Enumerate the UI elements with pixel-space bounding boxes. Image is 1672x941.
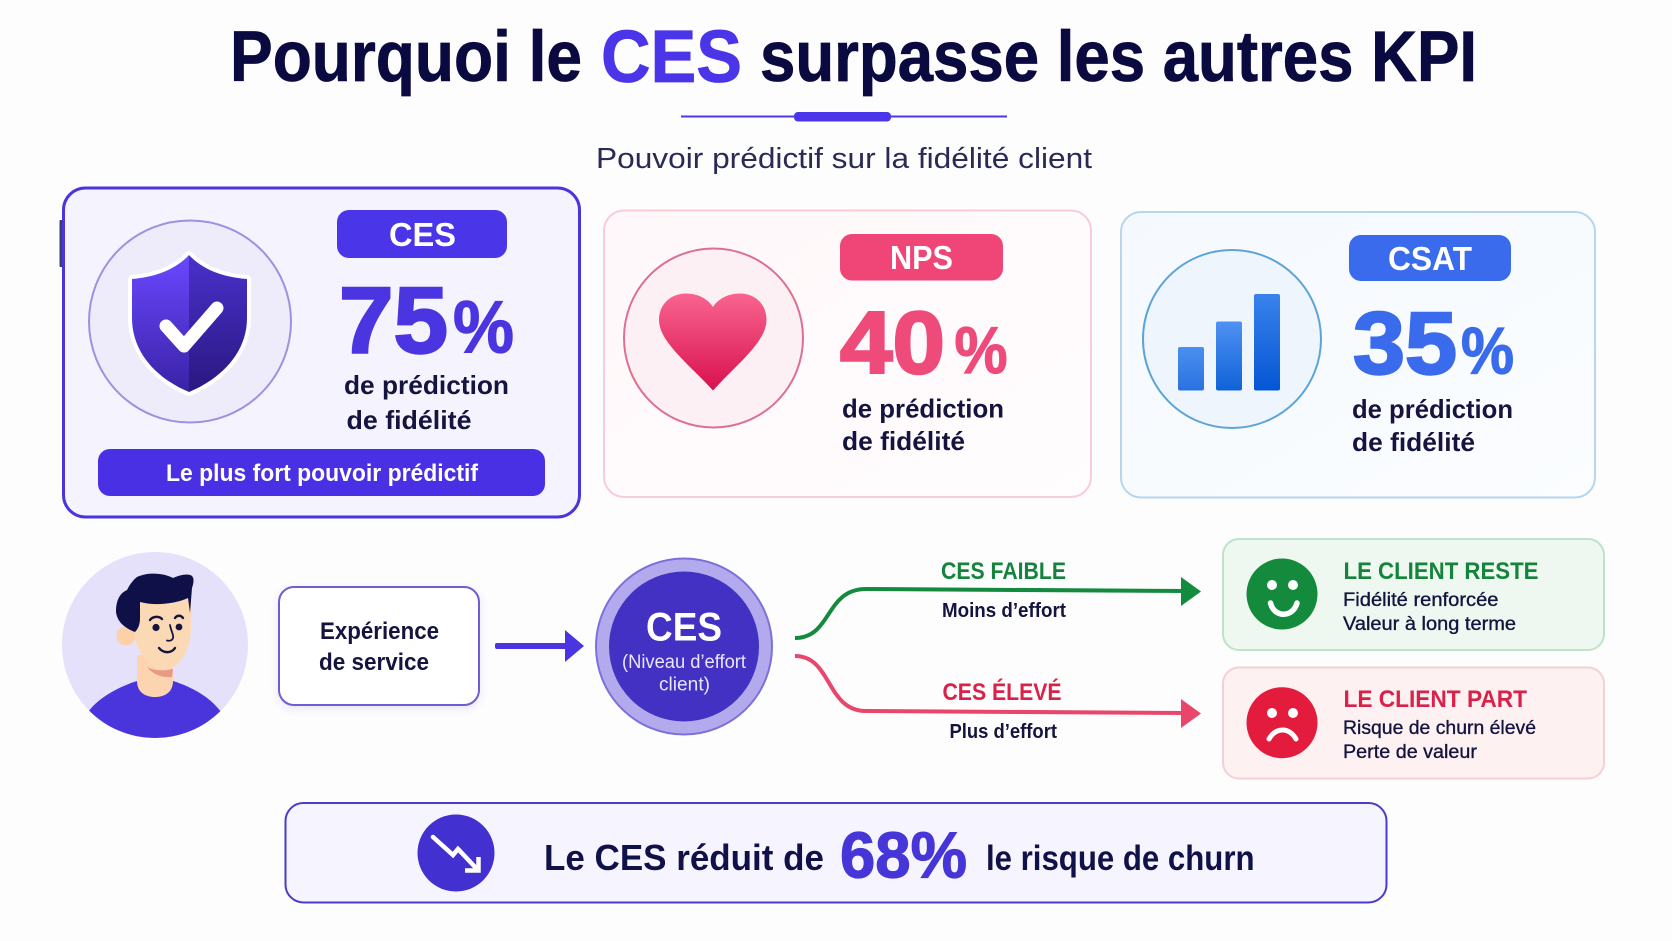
stat: 75%: % [453, 286, 514, 368]
label: low CES: Moins d’effort [942, 600, 1066, 622]
title: surpasse les autres KPI [760, 18, 1477, 97]
stat caption: CSAT: de prédiction [1352, 394, 1513, 424]
title [230, 15, 1477, 98]
icon: bar chart [1143, 250, 1321, 428]
banner text: le risque de churn [986, 839, 1254, 878]
label: high CES: Plus d’effort [950, 721, 1057, 743]
arrow: low CES path [795, 577, 1201, 638]
box: service experience: Expérience [320, 618, 439, 645]
icon: downward trend [418, 814, 494, 892]
panel: churn reduction banner [286, 803, 1386, 902]
banner text: Le CES réduit de [544, 837, 824, 878]
arrow: high CES path [795, 656, 1201, 728]
node: CES effort score: client) [659, 674, 710, 696]
node: CES effort score: CES [646, 606, 722, 650]
icon: sad face [1246, 687, 1318, 758]
badge: CSAT [1349, 235, 1511, 281]
badge: CES: CES [389, 216, 456, 253]
banner text: 68% [840, 818, 967, 892]
panel: client leaves: Risque de churn élevé [1343, 718, 1536, 739]
box: service experience [279, 587, 479, 705]
stat: 75% [339, 268, 514, 372]
node: CES effort score: (Niveau d’effort [622, 652, 747, 673]
stat caption: CES: de fidélité [346, 405, 472, 435]
stat: 35% [1353, 294, 1514, 392]
banner text [544, 818, 1254, 892]
title: CES [601, 15, 742, 98]
stat caption: NPS: de prédiction [842, 394, 1004, 424]
badge: CES [337, 210, 507, 258]
title underline [681, 112, 1007, 122]
badge: NPS [840, 234, 1003, 280]
panel: CES [60, 188, 580, 517]
label: high CES [942, 678, 1062, 743]
label: low CES [941, 558, 1066, 622]
panel: client leaves [1223, 668, 1604, 778]
panel: client leaves: LE CLIENT PART [1344, 686, 1527, 713]
icon: heart [624, 248, 803, 428]
stat: 40%: % [954, 313, 1008, 387]
icon: customer portrait [62, 552, 248, 738]
label: low CES: CES FAIBLE [941, 558, 1066, 585]
stat: 35%: 35 [1353, 294, 1457, 392]
stat: 75%: 75 [339, 268, 448, 372]
panel: client stays: Fidélité renforcée [1343, 590, 1498, 611]
stat: 40%: 40 [840, 293, 945, 392]
stat caption: CSAT: de fidélité [1352, 427, 1475, 457]
panel: client stays: Valeur à long terme [1343, 614, 1516, 635]
stat caption: CES [344, 370, 509, 435]
label: high CES: CES ÉLEVÉ [942, 678, 1062, 706]
box: service experience: de service [319, 649, 429, 676]
callout: strongest predictive power: Le plus fort pouvoir prédictif [166, 460, 479, 487]
icon: shield with check [89, 220, 291, 422]
badge: CSAT: CSAT [1388, 240, 1472, 277]
stat: 40% [840, 293, 1008, 392]
panel: NPS [604, 210, 1091, 497]
stat caption: CSAT [1352, 394, 1513, 457]
node: CES effort score [596, 558, 772, 734]
stat: 35%: % [1461, 314, 1514, 388]
stat caption: NPS: de fidélité [842, 426, 965, 456]
subtitle: Pouvoir prédictif sur la fidélité client [596, 143, 1092, 175]
callout: strongest predictive power [98, 449, 545, 496]
stat caption: CES: de prédiction [344, 370, 509, 400]
badge: NPS: NPS [890, 239, 953, 276]
panel: client stays: LE CLIENT RESTE [1344, 558, 1538, 585]
arrow: experience to CES [495, 630, 584, 662]
panel: client stays [1223, 539, 1604, 650]
icon: happy face [1246, 558, 1318, 630]
panel: CSAT [1121, 212, 1595, 498]
stat caption: NPS [842, 394, 1004, 456]
panel: client leaves: Perte de valeur [1343, 742, 1478, 763]
title: Pourquoi le [230, 18, 582, 97]
